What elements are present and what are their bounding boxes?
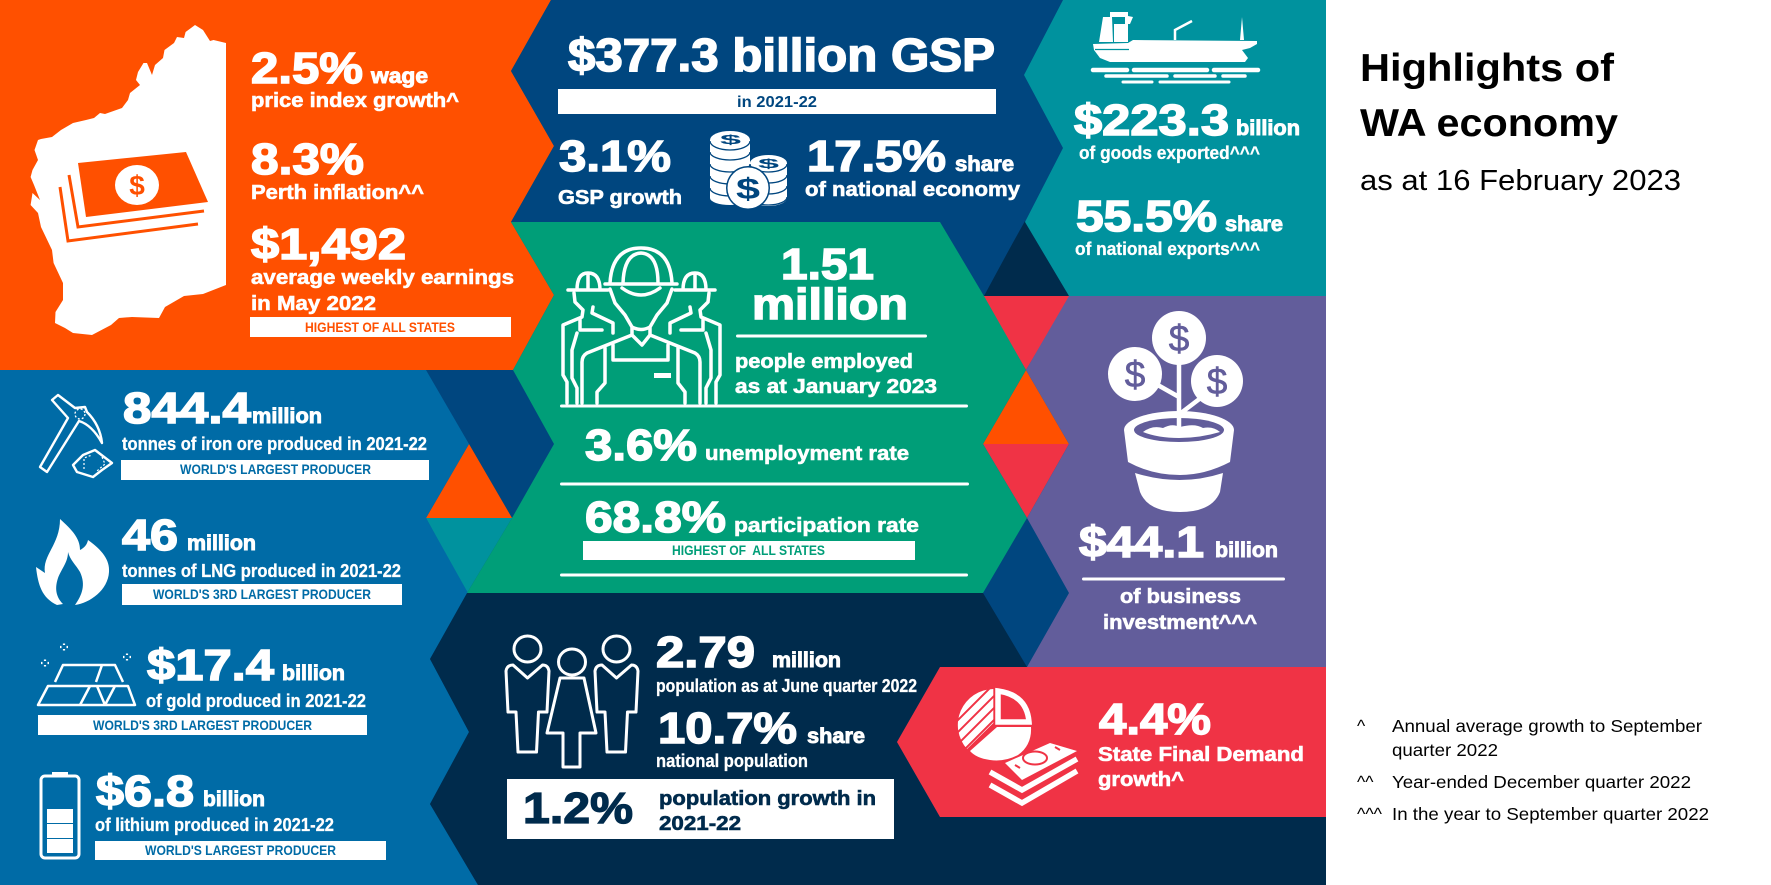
footnotes: In the year to September quarter 2022 <box>1392 804 1709 824</box>
stat: goods exported: of goods exported^^^ <box>1079 143 1260 163</box>
panel: mining and resources <box>0 370 478 885</box>
icon: pickaxe and ore <box>40 395 112 477</box>
icon: coin stacks: $ <box>736 173 760 206</box>
stat: share of national exports: 55.5% <box>1076 192 1217 241</box>
stat: state final demand growth: 4.4% <box>1099 695 1211 744</box>
stat: business investment: $44.1 <box>1079 518 1204 567</box>
stat: LNG: million <box>187 532 256 555</box>
footnotes <box>1357 716 1709 824</box>
stat: LNG <box>122 511 402 605</box>
panel: population <box>430 593 1326 885</box>
panel: exports <box>1024 0 1326 296</box>
icon: money plant in pot: $ <box>1207 361 1227 402</box>
stat: business investment: investment^^^ <box>1103 612 1257 634</box>
stat: unemployment rate <box>585 421 909 470</box>
stat: participation rate: 68.8% <box>585 493 726 542</box>
icon: cargo ship <box>1093 12 1258 82</box>
icon: WA map with banknotes: $ <box>129 170 145 201</box>
stat: state final demand growth <box>1098 695 1304 791</box>
stat: GSP headline: $377.3 billion GSP <box>568 29 995 81</box>
stat: wage price index: price index growth^ <box>251 90 459 112</box>
callout: population growth: 2021-22 <box>659 813 741 835</box>
stat: people employed: 1.51 <box>781 240 874 289</box>
icon: money plant in pot: $ <box>1125 354 1145 395</box>
stat: population total: 2.79 <box>656 628 755 677</box>
stat: Perth inflation: 8.3% <box>251 135 364 184</box>
stat: lithium <box>95 767 386 860</box>
stat: participation rate <box>583 493 919 560</box>
title: Highlights of <box>1360 47 1615 90</box>
stat: share of national economy: 17.5% <box>807 132 946 181</box>
stat: people employed: as at January 2023 <box>735 376 937 398</box>
stat: goods exported: $223.3 <box>1074 96 1229 145</box>
stat: lithium: billion <box>203 788 265 811</box>
icon: coin stacks: $ <box>758 156 781 171</box>
stat: gold: $17.4 <box>147 641 275 690</box>
icon: WA map with banknotes <box>31 25 226 335</box>
icon: money plant in pot <box>1108 311 1243 512</box>
stat: people employed <box>735 240 937 398</box>
stat: share of national economy: of national economy <box>805 179 1021 201</box>
icon: three people <box>506 636 638 767</box>
stat: goods exported <box>1074 96 1300 163</box>
stat: GSP growth <box>558 132 682 209</box>
stat: participation rate: participation rate <box>734 515 919 537</box>
subtitle: date: as at 16 February 2023 <box>1360 165 1681 197</box>
stat: average weekly earnings <box>250 220 514 337</box>
stat: share of national population: 10.7% <box>658 704 797 753</box>
panel: state final demand <box>897 667 1326 817</box>
stat: average weekly earnings: average weekly earnings <box>251 267 514 289</box>
stat: gold <box>38 641 367 735</box>
title <box>1360 47 1618 145</box>
icon: LNG flame <box>36 519 109 605</box>
stat: share of national exports <box>1075 192 1283 259</box>
stat: state final demand growth: State Final Demand <box>1098 744 1304 766</box>
stat: LNG: 46 <box>122 511 178 560</box>
callout: population growth: population growth in <box>659 788 876 810</box>
callout: population growth <box>507 779 894 839</box>
stat: share of national economy <box>805 132 1021 201</box>
stat: iron ore: tonnes of iron ore produced in 2021-22 <box>122 434 427 454</box>
footnotes: ^^ <box>1357 772 1374 792</box>
stat: gold: of gold produced in 2021-22 <box>146 691 366 711</box>
stat: share of national population <box>656 704 865 771</box>
stat: lithium: $6.8 <box>96 767 194 816</box>
stat: state final demand growth: growth^ <box>1098 769 1184 791</box>
panel: wages and prices <box>0 0 554 370</box>
stat: gold: WORLD'S 3RD LARGEST PRODUCER <box>93 717 312 733</box>
stat: share of national exports: of national exports^^^ <box>1075 239 1260 259</box>
panel: gross state product <box>511 0 1063 296</box>
panel: employment <box>467 0 1283 593</box>
stat: unemployment rate: unemployment rate <box>705 443 909 465</box>
stat: gold: billion <box>282 662 345 685</box>
stat: GSP headline <box>558 29 996 114</box>
stat: wage price index: wage <box>370 65 428 88</box>
stat: share of national economy: share <box>955 153 1014 176</box>
stat: population total: population as at June quarter 2022 <box>656 676 917 696</box>
stat: share of national population: share <box>807 725 865 748</box>
footnotes: ^ <box>1357 716 1366 736</box>
stat: GSP growth: GSP growth <box>558 187 682 209</box>
stat: Perth inflation <box>251 135 424 204</box>
stat: average weekly earnings: HIGHEST OF ALL STATES <box>305 319 455 335</box>
icon: pie chart and banknotes <box>958 688 1078 806</box>
stat: population total <box>656 628 917 696</box>
stat: iron ore <box>121 384 429 480</box>
stat: lithium: WORLD'S LARGEST PRODUCER <box>145 842 336 858</box>
stat: share of national exports: share <box>1225 213 1283 236</box>
stat: iron ore: million <box>252 405 322 428</box>
stat: iron ore: WORLD'S LARGEST PRODUCER <box>180 461 371 477</box>
stat: business investment: billion <box>1215 539 1278 562</box>
stat: lithium: of lithium produced in 2021-22 <box>95 815 334 835</box>
stat: GSP headline: in 2021-22 <box>737 94 817 111</box>
stat: people employed: people employed <box>735 351 913 373</box>
stat: LNG: tonnes of LNG produced in 2021-22 <box>122 561 401 581</box>
stat: wage price index <box>251 44 459 112</box>
stat: people employed: million <box>752 280 908 329</box>
callout: population growth: 1.2% <box>523 784 633 833</box>
icon: coin stacks <box>710 131 787 210</box>
icon: battery <box>41 772 79 858</box>
stat: business investment <box>1079 518 1285 634</box>
footnotes: Annual average growth to September <box>1392 716 1702 736</box>
stat: share of national population: national population <box>656 751 808 771</box>
icon: gold bars <box>38 644 135 705</box>
stat: average weekly earnings: $1,492 <box>251 220 406 269</box>
stat: population total: million <box>772 649 841 672</box>
footnotes: ^^^ <box>1357 804 1383 824</box>
stat: iron ore: 844.4 <box>123 384 252 433</box>
icon: money plant in pot: $ <box>1169 318 1189 359</box>
panel: business investment <box>1026 296 1326 667</box>
stat: average weekly earnings: in May 2022 <box>251 293 376 315</box>
stat: wage price index: 2.5% <box>251 44 363 93</box>
footnotes: Year-ended December quarter 2022 <box>1392 772 1691 792</box>
stat: Perth inflation: Perth inflation^^ <box>251 182 424 204</box>
footnotes: quarter 2022 <box>1392 740 1498 760</box>
icon: coin stacks: $ <box>720 132 743 147</box>
stat: business investment: of business <box>1120 586 1241 608</box>
stat: GSP growth: 3.1% <box>559 132 671 181</box>
icon: construction workers <box>563 0 1283 403</box>
stat: goods exported: billion <box>1236 117 1300 140</box>
stat: unemployment rate: 3.6% <box>585 421 697 470</box>
stat: participation rate: HIGHEST OF ALL STATES <box>672 542 825 558</box>
stat: LNG: WORLD'S 3RD LARGEST PRODUCER <box>153 586 371 602</box>
title: WA economy <box>1360 102 1618 145</box>
